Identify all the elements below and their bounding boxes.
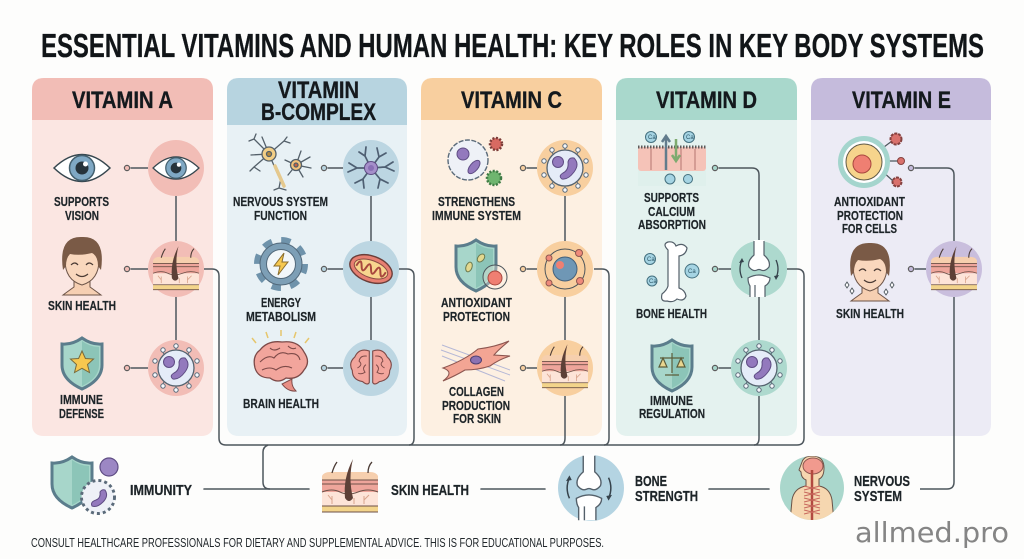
header: vitamin B-complex: B-COMPLEX [261, 99, 376, 126]
label: immune defense: IMMUNE [60, 392, 103, 407]
label: collagen production for skin [442, 384, 510, 426]
header: vitamin A: VITAMIN A [72, 87, 173, 114]
label: immune defense: DEFENSE [59, 406, 104, 421]
header: vitamin D [616, 78, 797, 120]
panel: vitamin A [32, 78, 213, 436]
bottom row: bone strength [558, 455, 698, 521]
icon: shield with star [62, 338, 102, 389]
icon: immune cell and germs [448, 138, 502, 185]
label: immune defense [59, 392, 104, 421]
system circles: vitamin A [148, 140, 204, 396]
label: nervous system function: FUNCTION [254, 208, 307, 223]
label: nervous system: SYSTEM [854, 488, 902, 505]
icon: human nervous system [780, 456, 844, 522]
label: supports calcium absorption: CALCIUM [648, 204, 695, 219]
icon: face with sparkles [845, 243, 894, 301]
bottom row: skin health [322, 459, 469, 512]
label: supports vision: VISION [65, 208, 99, 223]
label: strengthens immune system [432, 194, 521, 223]
label: strengthens immune system: IMMUNE SYSTEM [432, 208, 521, 223]
icon: antioxidant shield [456, 240, 507, 291]
icon: bone and calcium: Ca [688, 269, 696, 275]
header: vitamin A [32, 78, 213, 120]
label: antioxidant protection for cells [834, 194, 905, 236]
label: supports vision [54, 194, 109, 223]
label: brain health: BRAIN HEALTH [243, 396, 319, 411]
label: antioxidant protection: ANTIOXIDANT [441, 295, 512, 310]
label: supports calcium absorption: SUPPORTS [644, 190, 699, 205]
panel: vitamin C [421, 78, 602, 436]
system circles: vitamin D [731, 240, 787, 396]
label: skin health: SKIN HEALTH [391, 482, 469, 499]
icon: eye [54, 154, 110, 182]
label: nervous system: NERVOUS [854, 473, 910, 490]
header: vitamin C [421, 78, 602, 120]
label: bone health: BONE HEALTH [636, 306, 707, 321]
label: antioxidant protection for cells: FOR CELLS [842, 221, 897, 236]
label: energy metabolism: METABOLISM [246, 309, 316, 324]
panel: vitamin B-complex [227, 77, 407, 436]
label: immune regulation: REGULATION [639, 406, 705, 421]
icon: neurons [249, 134, 311, 190]
header: vitamin C: VITAMIN C [461, 87, 562, 114]
label: antioxidant protection [441, 295, 512, 324]
label: supports calcium absorption [638, 190, 706, 232]
label: supports vision: SUPPORTS [54, 194, 109, 209]
header: vitamin B-complex: VITAMIN [278, 77, 359, 104]
label: skin health: SKIN HEALTH [836, 306, 904, 321]
label: immune regulation [639, 393, 705, 421]
icon: shield and immune cell [52, 457, 118, 514]
header: vitamin E [811, 78, 991, 120]
connector lines [124, 165, 954, 489]
icon: antioxidant cell [838, 134, 904, 188]
icon: knee joint [558, 455, 624, 521]
label: nervous system [854, 473, 910, 505]
label: antioxidant protection: PROTECTION [443, 309, 510, 324]
label: strengthens immune system: STRENGTHENS [438, 194, 515, 209]
bottom row: nervous system [780, 456, 910, 522]
label: immunity: IMMUNITY [130, 482, 192, 499]
bottom row: immunity [52, 457, 192, 514]
label: antioxidant protection for cells: PROTECTION [837, 208, 903, 223]
label: collagen production for skin: COLLAGEN [449, 384, 504, 399]
header: vitamin B-complex [227, 77, 407, 126]
icon: skin cross-section [322, 459, 378, 512]
label: energy metabolism [246, 295, 316, 324]
label: bone strength: STRENGTH [635, 488, 698, 505]
label: nervous system function [233, 194, 328, 223]
icon: gear with lightning [258, 240, 304, 288]
icon: collagen cell [441, 341, 510, 381]
footer disclaimer: CONSULT HEALTHCARE PROFESSIONALS FOR DIETARY AND SUPPLEMENTAL ADVICE. THIS IS FOR EDUCATIONAL PURPOSES. [31, 535, 604, 550]
icon: brain with rays [252, 330, 309, 391]
panel: vitamin D [616, 78, 797, 436]
header: vitamin E: VITAMIN E [852, 87, 951, 114]
watermark: allmed.pro [855, 516, 1009, 549]
label: nervous system function: NERVOUS SYSTEM [233, 194, 328, 209]
system circles: vitamin B-complex [343, 140, 399, 396]
icon: calcium absorption: Ca [648, 135, 656, 141]
label: collagen production for skin: PRODUCTION [442, 398, 510, 413]
header: vitamin D: VITAMIN D [656, 87, 757, 114]
label: bone strength [635, 473, 698, 505]
label: energy metabolism: ENERGY [261, 295, 301, 310]
icon: bone and calcium [644, 242, 699, 302]
system circle: vitamin E [926, 241, 982, 297]
icon: face [62, 237, 102, 295]
label: immune regulation: IMMUNE [650, 393, 693, 408]
label: skin health: SKIN HEALTH [48, 298, 116, 313]
label: supports calcium absorption: ABSORPTION [638, 217, 706, 232]
icon: calcium absorption [638, 132, 706, 186]
label: antioxidant protection for cells: ANTIOXIDANT [834, 194, 905, 209]
panel: vitamin E [811, 78, 991, 436]
label: bone strength: BONE [635, 473, 667, 490]
icon: bone and calcium: Ca [647, 257, 655, 263]
icon: calcium absorption: Ca [686, 135, 694, 141]
system circles: vitamin C [537, 140, 593, 396]
icon: bone and calcium: Ca [649, 279, 657, 285]
label: collagen production for skin: FOR SKIN [453, 411, 501, 426]
icon: shield with scales [652, 340, 692, 391]
